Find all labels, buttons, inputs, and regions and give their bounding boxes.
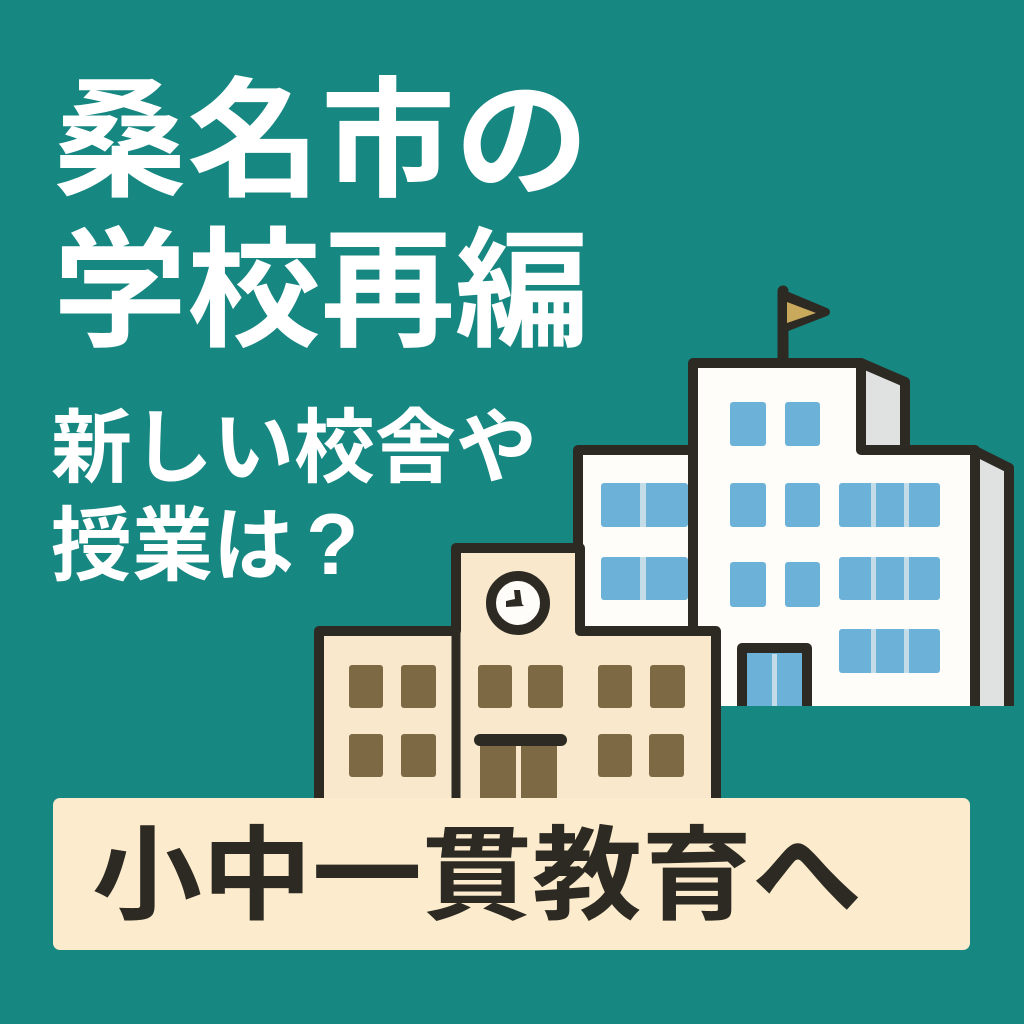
- beige building body: [319, 548, 716, 800]
- illustration: white school building: [578, 291, 1009, 706]
- clock: [491, 576, 545, 630]
- banner: [53, 798, 970, 950]
- white building door: [742, 648, 807, 706]
- main block windows: [730, 402, 940, 673]
- subtitle: 新しい校舎や: [51, 404, 537, 494]
- banner text: 小中一貫教育へ: [92, 819, 862, 933]
- flag: [783, 291, 826, 358]
- beige building door: [474, 734, 567, 800]
- title: 桑名市の: [53, 69, 589, 214]
- left wing: [578, 450, 698, 632]
- title: [53, 69, 589, 364]
- subtitle: [51, 404, 537, 593]
- side wall of lower block: [975, 451, 1009, 706]
- brown windows: [349, 665, 685, 777]
- subtitle: 授業は?: [51, 497, 359, 593]
- main block: [693, 363, 975, 706]
- illustration: beige school building: [319, 548, 716, 800]
- left wing windows: [601, 483, 688, 600]
- wing divider: [452, 631, 460, 800]
- side wall of upper tower: [861, 363, 905, 450]
- title: 学校再編: [53, 219, 589, 364]
